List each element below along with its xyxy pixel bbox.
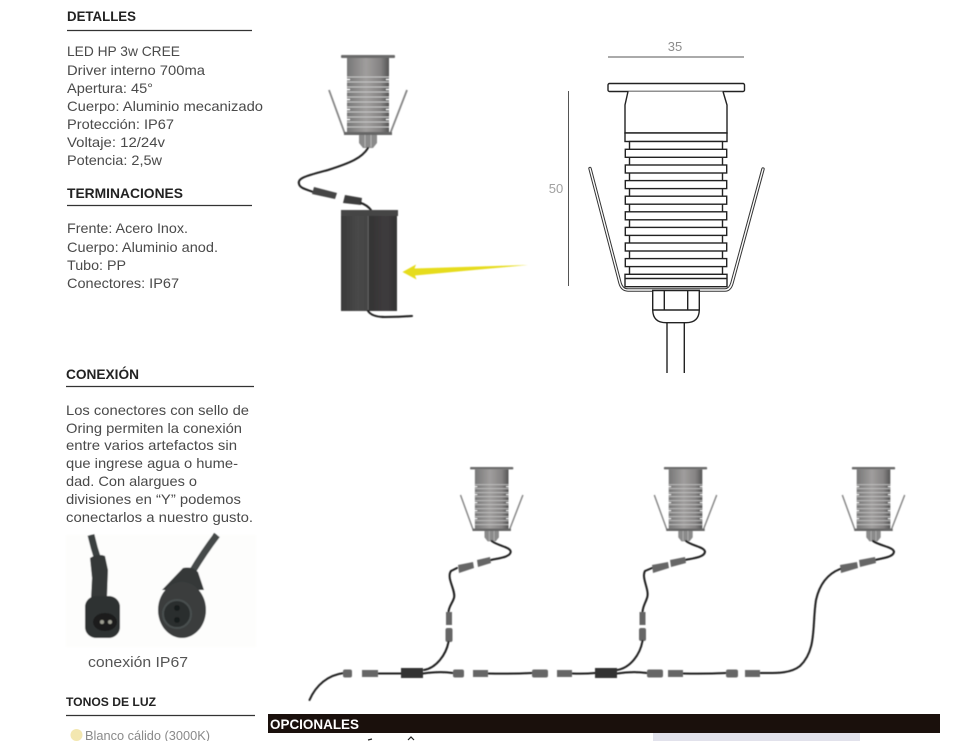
text block: connection description <box>66 402 253 525</box>
caption: conexion IP67: conexión IP67 <box>88 654 188 671</box>
panel: terminaciones <box>67 185 252 291</box>
heading: detalles: DETALLES <box>67 8 136 24</box>
heading: tonos de luz: TONOS DE LUZ <box>66 695 156 709</box>
text block: specifications: Voltaje: 12/24v <box>67 134 165 150</box>
text block: specifications: LED HP 3w CREE <box>67 43 180 59</box>
banner: opcionales: OPCIONALES <box>270 716 359 732</box>
text block: connection description: que ingrese agua o hume- <box>66 455 238 471</box>
text block: finishes <box>67 220 218 291</box>
lamp 3 <box>760 467 905 673</box>
text block: connection description: Los conectores con sello de <box>66 402 249 418</box>
drawing: clip springs <box>590 168 763 290</box>
text block: connection description: entre varios artefactos sin <box>66 437 237 453</box>
wiring diagram <box>310 467 905 700</box>
icon: warm white swatch <box>70 729 82 741</box>
dimension: width 35 <box>608 39 744 57</box>
dimension: height 50: 50 <box>549 181 563 196</box>
text block: connection description: Oring permiten la conexión <box>66 420 242 436</box>
text block: connection description: divisiones en “Y” podemos <box>66 491 241 507</box>
main cable line <box>310 668 760 700</box>
lamp 1 <box>424 467 523 670</box>
product illustration with driver <box>299 55 528 317</box>
lamp 2 <box>617 467 717 670</box>
text block: connection description: conectarlos a nuestro gusto. <box>66 509 253 525</box>
text block: specifications: Apertura: 45° <box>67 80 153 96</box>
arrow: yellow pointer <box>402 264 528 280</box>
text block: specifications: Protección: IP67 <box>67 116 174 132</box>
text block: specifications: Potencia: 2,5w <box>67 152 163 168</box>
drawing: cable gland and cable <box>653 290 699 373</box>
dimension: width 35: 35 <box>668 39 682 54</box>
driver box <box>341 210 412 317</box>
text block: finishes: Tubo: PP <box>67 257 126 273</box>
technical drawing <box>549 39 763 373</box>
photo: IP67 connectors <box>66 535 256 647</box>
drawing: lamp body <box>608 84 744 287</box>
cropped options image <box>368 733 860 741</box>
panel: conexion <box>66 365 256 671</box>
text block: specifications: Cuerpo: Aluminio mecanizado <box>67 98 263 114</box>
icon: lamp <box>329 55 407 148</box>
text block: specifications <box>67 43 263 168</box>
text block: finishes: Frente: Acero Inox. <box>67 220 188 236</box>
panel: tonos de luz <box>66 695 255 741</box>
text block: finishes: Cuerpo: Aluminio anod. <box>67 239 218 255</box>
cable and connectors <box>299 148 371 210</box>
banner: opcionales <box>268 714 940 733</box>
text block: finishes: Conectores: IP67 <box>67 275 179 291</box>
text block: specifications: Driver interno 700ma <box>67 62 205 78</box>
heading: terminaciones: TERMINACIONES <box>67 185 183 201</box>
heading: conexion: CONEXIÓN <box>66 365 139 382</box>
panel: detalles <box>67 8 263 168</box>
text block: connection description: dad. Con alargues o <box>66 473 197 489</box>
